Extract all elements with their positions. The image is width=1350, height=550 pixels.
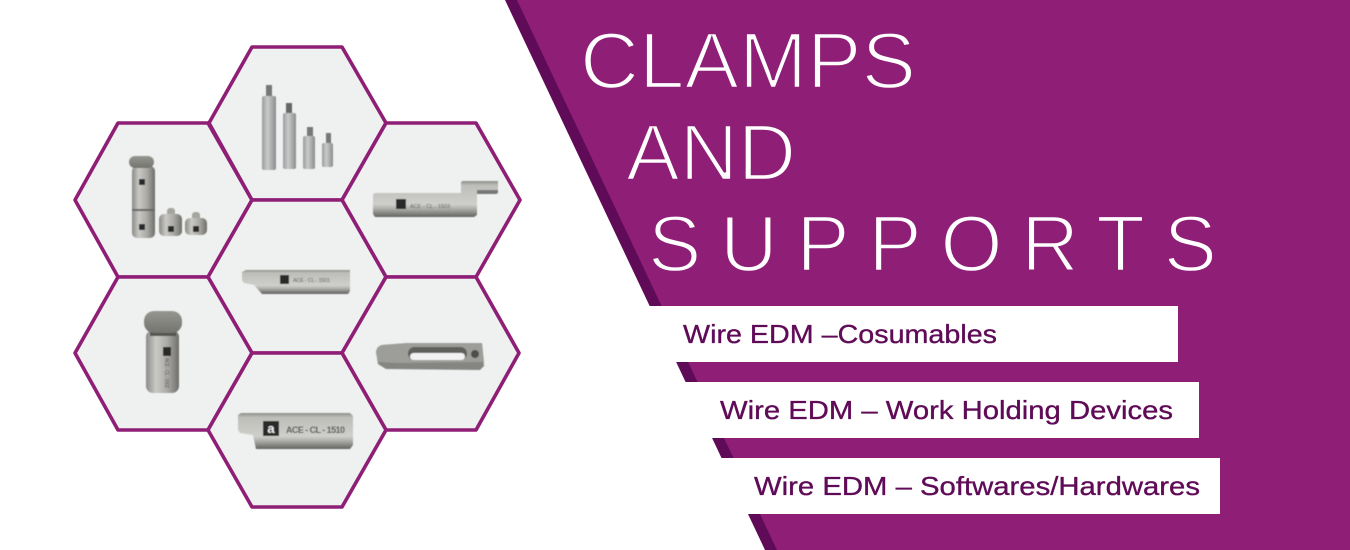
title: Clamps and Supports [580, 16, 1217, 288]
list item: Wire EDM Cosumables [560, 306, 1178, 362]
hexagon: support pins [209, 47, 386, 200]
hexagon: clamp ACE-CL-1510 [208, 353, 386, 507]
hexagon: slotted clamp [342, 277, 519, 430]
list item: Wire EDM Work Holding Devices: Wire EDM – Work Holding Devices [720, 395, 1173, 425]
list item: Wire EDM Softwares/Hardwares [640, 458, 1220, 514]
hexagon: clamp ACE-CL-1510: ACE - CL - 1510 [286, 425, 345, 435]
hexagon: cylinder set [75, 123, 252, 277]
list item: Wire EDM Cosumables: Wire EDM –Cosumables [683, 319, 997, 349]
hexagon: stepped clamp ACE-CL-1503: ACE - CL - 1503 [410, 204, 450, 210]
title: Clamps and Supports: SUPPORTS [648, 199, 1217, 288]
title: Clamps and Supports: AND [626, 108, 796, 197]
title: Clamps and Supports: CLAMPS [580, 16, 916, 105]
list item: Wire EDM Softwares/Hardwares: Wire EDM – Softwares/Hardwares [754, 471, 1200, 501]
purple diagonal panel [505, 0, 1350, 550]
hexagon: stepped clamp ACE-CL-1503 [342, 123, 520, 277]
hexagon: clamp ACE-CL-1510: a [267, 421, 275, 436]
hexagon: bevelled clamp ACE-CL-1501 [208, 200, 386, 353]
hexagon: single cylinder [75, 277, 252, 430]
list item: Wire EDM Work Holding Devices [600, 382, 1199, 438]
hexagon: single cylinder: ACE - CL - 1502 [163, 358, 169, 388]
hexagon: bevelled clamp ACE-CL-1501: ACE - CL - 1501 [293, 278, 330, 284]
